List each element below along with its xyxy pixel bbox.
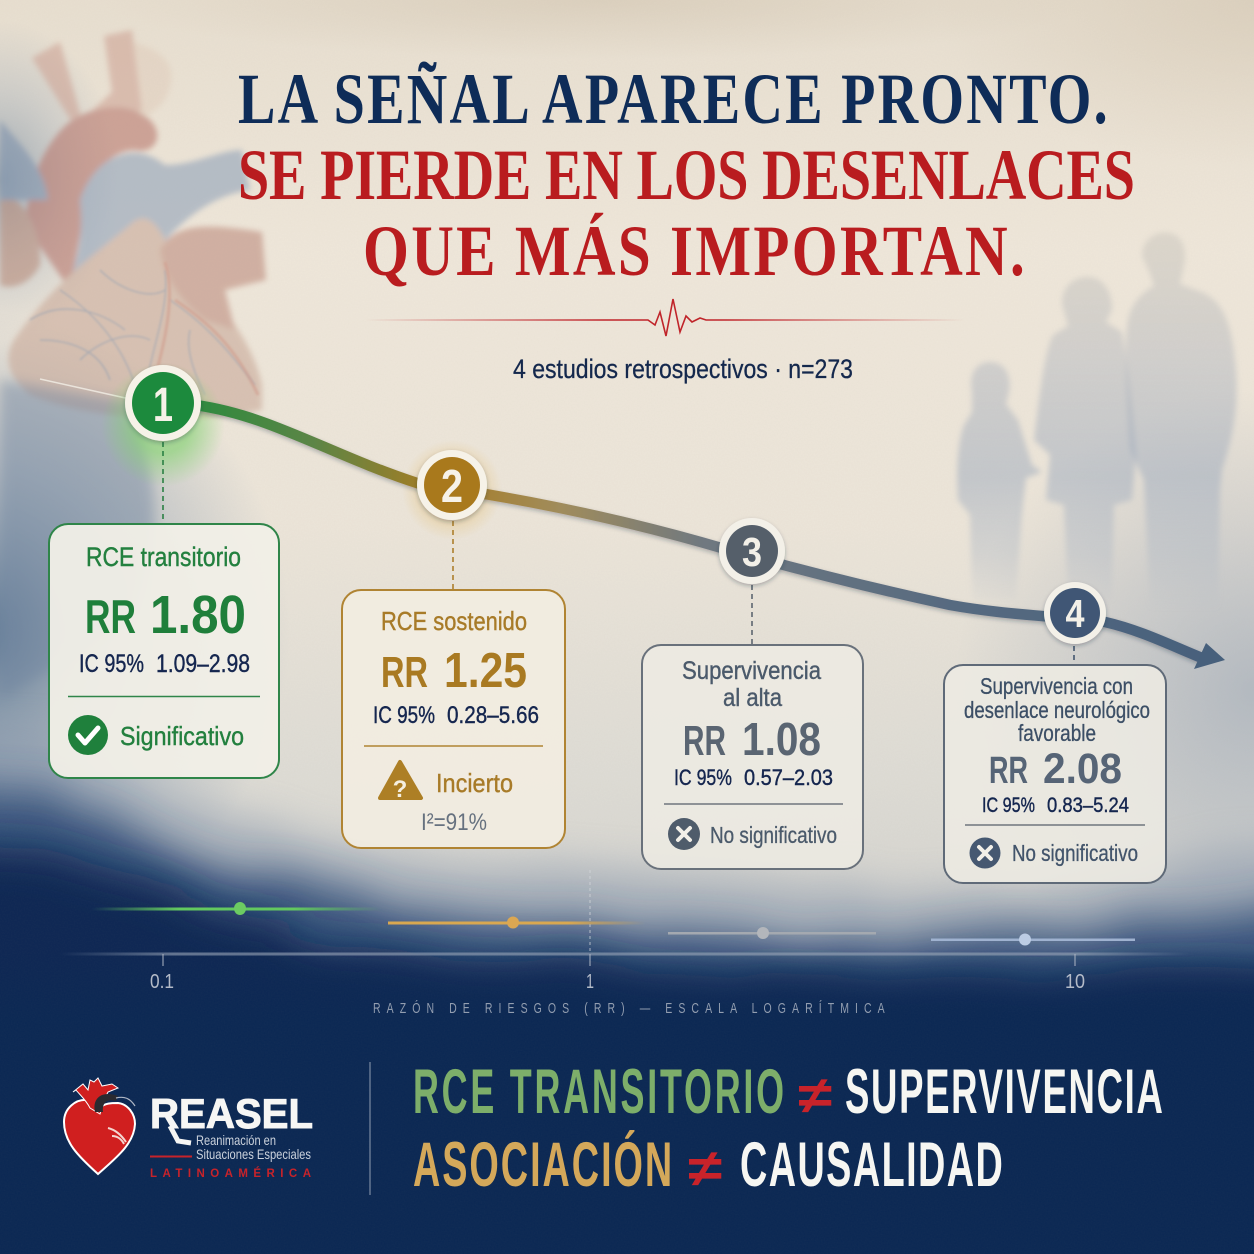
card 1 value [85,585,246,645]
statement: RCE transitorio is not survival: RCE TRANSITORIO [413,1056,784,1127]
logo tagline: Reanimación en [196,1132,276,1148]
statement: association is not causation: ASOCIACIÓN [413,1130,672,1201]
series: desenlace neurológico [931,934,1135,946]
title: SE PIERDE EN LOS DESENLACES [238,134,1135,215]
logo tagline: Situaciones Especiales [196,1146,311,1162]
statement: association is not causation: CAUSALIDAD [740,1130,1003,1201]
statement: association is not causation: ≠ [688,1140,722,1198]
card 2 confidence interval [373,702,539,729]
node 4 [1044,582,1106,644]
card 1 verdict: Significativo [120,721,244,751]
card 3 heading [682,657,821,712]
node 3: 3 [742,529,762,575]
card 3 value: RR [683,717,726,764]
card 2 heterogeneity: I²=91% [421,809,487,836]
card 1 value: 1.80 [150,585,246,645]
node 2 [417,450,487,520]
card 2 value: 1.25 [444,644,527,698]
logo: REASEL [64,1078,313,1180]
connector: node 4 to card 4 [1073,646,1075,665]
wordmark: REASEL [150,1090,313,1137]
node 1: 1 [153,379,173,432]
series: RCE transitorio [92,902,381,915]
axis labels [150,971,1085,993]
card 3 verdict: No significativo [710,822,837,848]
card 2 value: RR [381,648,428,697]
axis labels: 0.1 [150,971,174,993]
card 1 confidence interval: 1.09–2.98 [156,650,250,678]
card 2 heading: RCE sostenido [381,606,527,636]
illustration: anatomical heart [0,30,266,418]
subtitle: 4 estudios retrospectivos · n=273 [513,354,853,384]
card 4 verdict: No significativo [1012,840,1138,866]
card 3 confidence interval [674,765,833,790]
card 4 heading: Supervivencia con [980,673,1133,699]
card 2 verdict: Incierto [436,768,513,798]
declining signal curve with arrow [40,363,1225,669]
panel: card 3 Supervivencia al alta [642,645,863,869]
icon: warning triangle: ? [393,776,407,803]
card 4 value [989,745,1122,793]
node 3 [719,518,785,584]
lower-left shaded area under the line [0,380,155,700]
illustration: family silhouette in fog [957,232,1237,610]
card 3 confidence interval: IC 95% [674,765,732,790]
statement: RCE transitorio is not survival: ≠ [798,1067,832,1125]
card 3 value [683,713,821,765]
card 3 confidence interval: 0.57–2.03 [744,765,833,790]
title: QUE MÁS IMPORTAN. [363,212,1025,291]
icon: cross [970,838,1000,868]
bottom navy fog band [0,720,1254,1254]
node 1 [125,365,201,441]
panel: card 4 Supervivencia con desenlace neurológico favorable [944,665,1166,883]
card 1 heading: RCE transitorio [86,542,241,572]
connector: node 2 to card 2 [452,521,454,589]
icon: check [68,715,108,755]
icon: cross [668,818,700,850]
node 4: 4 [1066,593,1085,636]
card 4 value: 2.08 [1043,745,1122,793]
card 4 confidence interval [982,794,1129,817]
card 4 heading: favorable [1018,720,1096,746]
card 3 heading: al alta [723,684,782,712]
icon: warning triangle [380,762,421,803]
axis title: RAZÓN DE RIESGOS (RR) — ESCALA LOGARÍTMICA [373,999,885,1016]
statement: RCE transitorio is not survival [413,1056,1163,1127]
series: supervivencia al alta [668,927,876,939]
axis labels: 10 [1065,971,1085,993]
card 1 confidence interval [79,650,250,678]
logo region: LATINOAMÉRICA [150,1167,311,1180]
axis labels: 1 [586,971,594,993]
vertical footer divider [369,1062,371,1195]
connector: node 3 to card 3 [751,585,753,644]
title: LA SEÑAL APARECE PRONTO. [238,58,1108,139]
icon: red heart [64,1078,135,1174]
card 3 heading: Supervivencia [682,657,821,685]
ECG divider line [365,299,965,336]
card 4 heading [964,673,1150,746]
statement: RCE transitorio is not survival: SUPERVIVENCIA [845,1056,1163,1126]
card 1 value: RR [85,590,136,643]
card 4 confidence interval: IC 95% [982,794,1035,817]
title [238,58,1135,291]
statement: association is not causation [413,1130,1003,1201]
logo tagline [196,1132,311,1162]
card 2 value [381,644,527,698]
series: RCE sostenido [388,916,645,928]
panel: card 1 RCE transitorio [49,524,279,778]
card 4 value: RR [989,750,1028,792]
card 4 confidence interval: 0.83–5.24 [1047,794,1129,817]
card 4 heading: desenlace neurológico [964,697,1150,723]
card 2 confidence interval: 0.28–5.66 [447,702,539,729]
card 3 value: 1.08 [742,713,821,765]
panel: card 2 RCE sostenido [342,590,565,848]
chart: forest plot on log scale [60,870,1190,1016]
node 2: 2 [441,460,463,512]
card 2 confidence interval: IC 95% [373,702,435,729]
connector: node 1 to card 1 [162,442,164,524]
card 1 confidence interval: IC 95% [79,650,144,678]
